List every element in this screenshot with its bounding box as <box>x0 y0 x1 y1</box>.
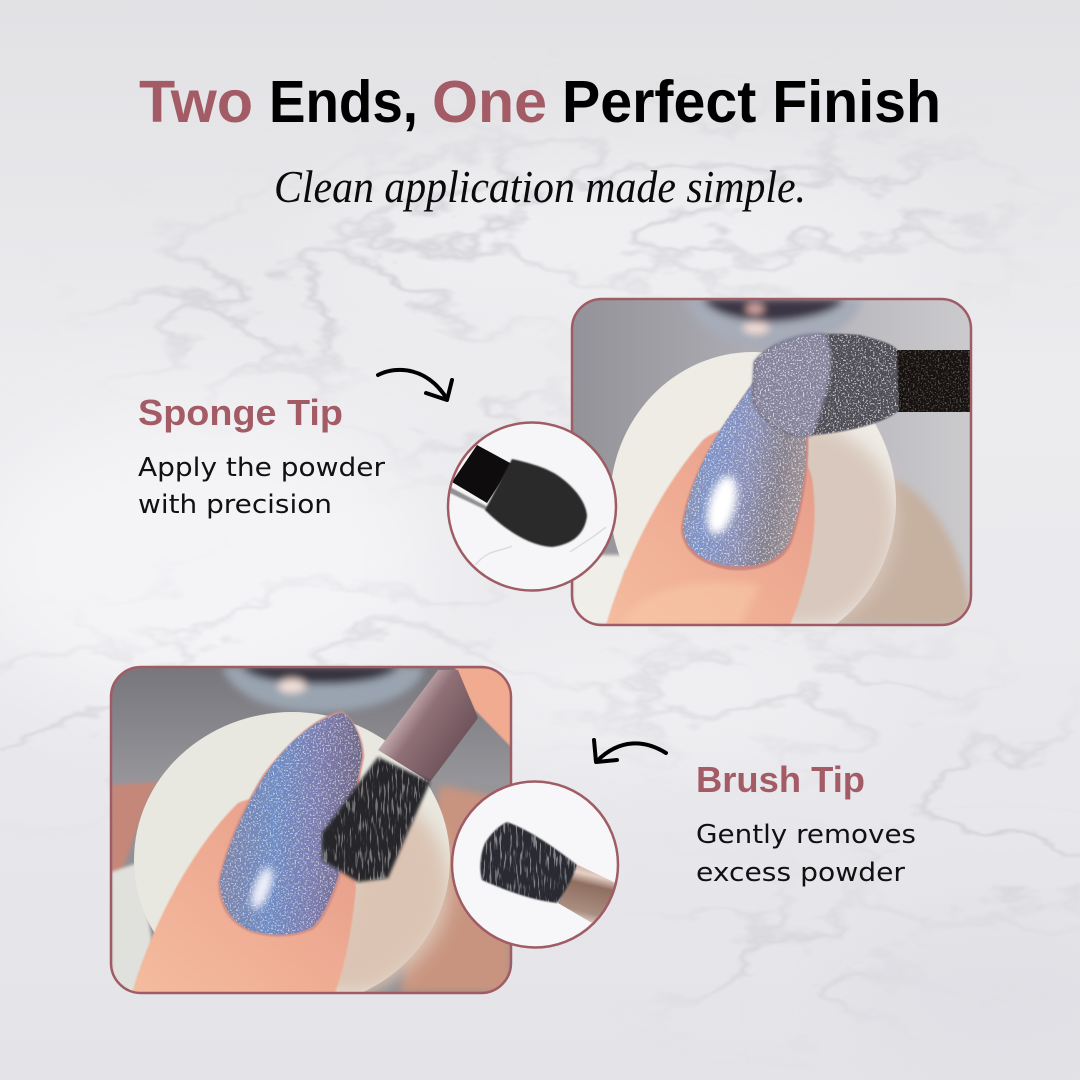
finger <box>606 426 815 625</box>
subtitle: Clean application made simple. <box>274 161 806 212</box>
finger <box>132 797 356 993</box>
icon: powder jar <box>689 300 862 346</box>
sponge tip heading: Sponge Tip <box>138 392 343 433</box>
title: Perfect Finish <box>562 69 941 135</box>
sponge tip description <box>138 453 386 520</box>
icon: powder jar <box>222 667 424 712</box>
title: One <box>432 69 547 135</box>
title <box>139 69 941 135</box>
icon: brush tip closeup <box>452 782 620 948</box>
brush tip description <box>696 820 916 888</box>
icon: sponge tip closeup <box>448 422 616 590</box>
title: Two <box>139 69 253 135</box>
sponge tip description: with precision <box>138 490 332 520</box>
sponge applicator <box>752 333 972 436</box>
title: Ends, <box>269 69 418 135</box>
arrow: to sponge tip <box>378 370 452 400</box>
brush applicator <box>322 668 511 882</box>
arrow: to brush tip <box>594 740 666 762</box>
nail <box>218 711 364 937</box>
sponge tip description: Apply the powder <box>138 453 386 483</box>
nail <box>681 365 808 570</box>
panel: sponge tip photo <box>572 299 972 652</box>
panel: brush tip photo <box>111 667 511 1008</box>
brush tip heading: Brush Tip <box>696 759 865 800</box>
brush tip description: Gently removes <box>696 820 916 850</box>
brush tip description: excess powder <box>696 858 906 888</box>
